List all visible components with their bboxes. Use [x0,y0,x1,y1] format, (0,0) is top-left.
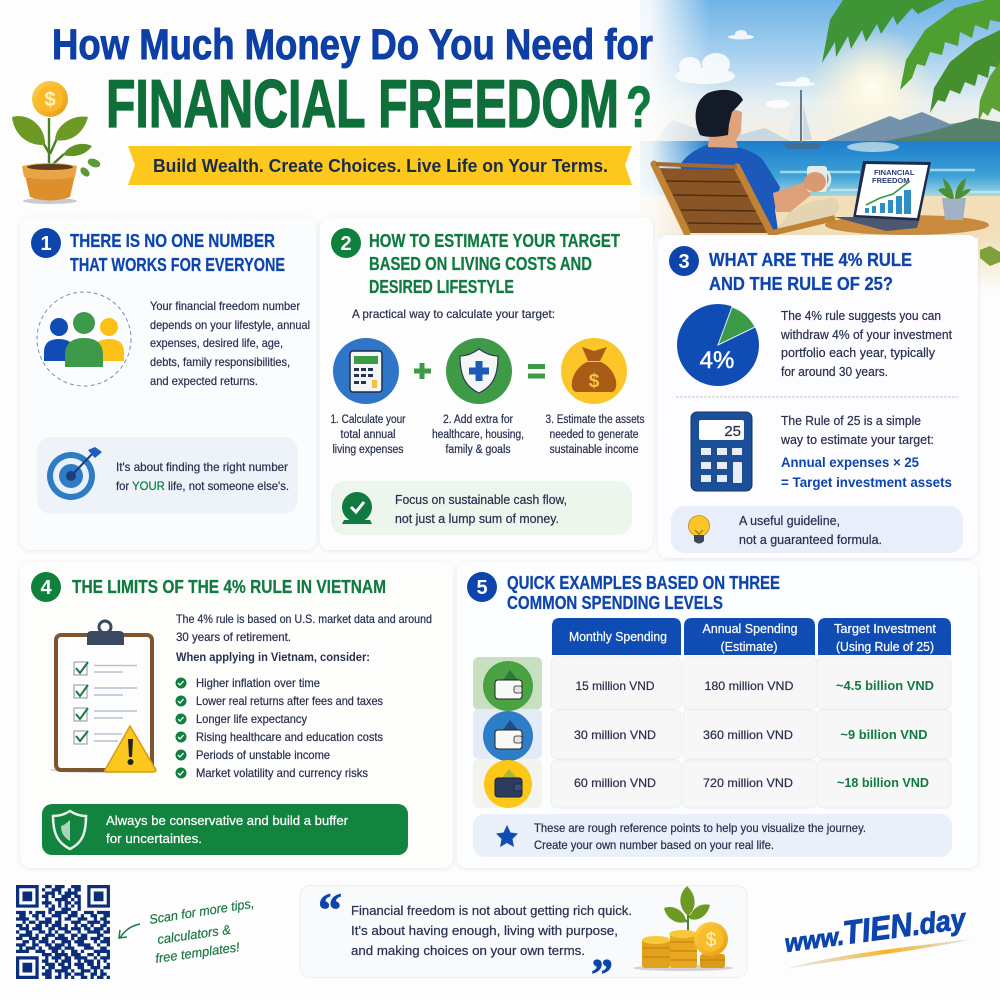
note box: These are rough reference points to help you visualize the journey. [534,821,866,835]
table header: (Using Rule of 25) [836,640,934,654]
tagline ribbon [128,146,632,185]
heading 3: AND THE RULE OF 25? [709,273,893,294]
callout: be conservative: for uncertaintes. [106,831,202,846]
table header [552,618,951,655]
step labels: living expenses [332,444,404,456]
title: How Much Money Do You Need for [52,21,653,69]
4% rule text: for around 30 years. [781,365,888,379]
rule of 25 text: Annual expenses × 25 [781,454,919,470]
step labels: family & goals [446,444,511,456]
laptop [834,161,931,231]
callout: guideline: A useful guideline, [739,514,840,528]
table rows: 720 million VND [703,776,793,790]
rule of 25 text [780,414,952,490]
tagline ribbon: Build Wealth. Create Choices. Live Life on Your Terms. [153,156,608,176]
body text: and expected returns. [150,374,258,388]
step labels [330,414,645,456]
plus sign [414,363,431,379]
quote text: Financial freedom is not about getting rich quick. [351,904,632,918]
badge 3 [669,246,699,276]
rule of 25 text: = Target investment assets [781,474,952,490]
laptop: FREEDOM [872,176,910,185]
panel 1: no one number [20,217,316,550]
pie chart 4%: 4% [700,347,734,374]
icon: bulb [688,516,710,544]
heading 3: WHAT ARE THE 4% RULE [709,249,912,270]
callout: be conservative: Always be conservative and build a buffer [106,813,349,828]
icon: calculator [333,338,399,404]
body text: expenses, desired life, age, [150,336,283,350]
badge 1: 1 [40,233,52,255]
heading 2 [369,230,621,297]
step labels: 3. Estimate the assets [546,414,645,426]
callout: be conservative [42,804,408,855]
body text: Your financial freedom number [150,299,300,313]
icon: calculator 25: 25 [724,423,741,440]
icon: target [47,447,102,500]
checklist: Lower real returns after fees and taxes [196,694,383,708]
plant with coin icon: $ [44,89,56,111]
icon: money bag [561,338,627,404]
badge 4 [31,572,61,602]
4% rule text [780,309,953,379]
quote text [351,904,632,958]
step labels: 1. Calculate your [330,414,406,426]
hero illustration: beach scene [620,0,1000,292]
heading 1 [70,230,285,275]
note box: Create your own number based on your real life. [534,838,774,852]
checklist: Periods of unstable income [196,748,330,762]
checklist: Market volatility and currency risks [196,766,368,780]
heading 1: THAT WORKS FOR EVERYONE [70,254,285,275]
heading 5: COMMON SPENDING LEVELS [507,592,723,613]
icon: people [37,292,131,386]
rule of 25 text: way to estimate your target: [780,433,934,447]
table rows: ~9 billion VND [840,727,928,742]
heading 5: QUICK EXAMPLES BASED ON THREE [507,572,780,593]
closing quote mark: ” [591,950,613,999]
icon: money bag: $ [589,371,600,392]
quote text: and making choices on your own terms. [351,944,585,958]
laptop: FINANCIAL [874,168,915,177]
callout: guideline [671,506,963,553]
title [52,21,653,142]
mountains [655,120,790,141]
table rows: ~18 billion VND [837,775,929,790]
title: FINANCIAL FREEDOM [106,66,619,142]
step labels: sustainable income [550,444,638,456]
intro text: When applying in Vietnam, consider: [176,650,370,664]
heading 5 [507,572,780,613]
icon: star [496,825,518,847]
website logo: www.TIEN.day [782,898,969,959]
callout: cash flow: not just a lump sum of money. [395,512,559,526]
table header: Annual Spending [702,622,798,636]
heading 3 [709,249,912,294]
4% rule text: portfolio each year, typically [781,346,936,360]
table with plant [825,178,989,235]
table header: Monthly Spending [569,630,667,644]
callout: guideline: not a guaranteed formula. [739,533,882,547]
badge 1 [31,228,61,258]
badge 3: 3 [678,251,690,273]
panel 5: quick examples [457,562,978,868]
opening quote mark: “ [318,884,342,937]
badge 2: 2 [340,233,352,255]
heading 1: THERE IS NO ONE NUMBER [70,230,275,251]
rule of 25 text: The Rule of 25 is a simple [781,414,921,428]
body text: depends on your lifestyle, annual [150,318,310,332]
note box [473,814,952,857]
table header: Target Investment [834,622,937,636]
heading 2: DESIRED LIFESTYLE [369,276,514,297]
man with coffee on deck chair [654,90,839,233]
table rows: 60 million VND [574,776,656,790]
icon: shield [53,811,86,849]
icon: check badge [342,492,372,524]
table rows [551,657,951,808]
QR code [16,885,110,979]
badge 4: 4 [40,577,52,599]
checklist [176,676,383,780]
body text [150,299,310,388]
4% rule text: The 4% rule suggests you can [781,309,941,323]
badge 2 [331,228,361,258]
step labels: 2. Add extra for [443,414,513,426]
table rows: 15 million VND [576,679,655,693]
step labels: total annual [340,429,396,441]
callout: right number [37,437,298,514]
wallet icon column [473,657,542,808]
quote box [300,884,747,999]
arrow to QR [119,924,140,938]
table rows: 180 million VND [704,679,794,693]
equals sign [528,366,545,376]
table rows: 360 million VND [703,728,793,742]
palm fronds [822,0,1000,123]
step labels: healthcare, housing, [432,429,524,441]
body text: debts, family responsibilities, [150,355,290,369]
icon: clipboard with warning [50,621,156,773]
checklist: Rising healthcare and education costs [196,730,383,744]
table rows: ~4.5 billion VND [836,678,934,693]
handwritten note: calculators & [156,922,232,947]
plant with coin icon [12,81,101,204]
badge 5 [467,572,497,602]
4% rule text: withdraw 4% of your investment [780,328,953,342]
pie chart 4% [677,304,759,386]
heading 2: BASED ON LIVING COSTS AND [369,253,592,274]
quote text: It's about having enough, living with purpose, [351,924,618,938]
callout: right number: for YOUR life, not someone else's. [116,479,289,493]
intro text: A practical way to calculate your target: [352,307,555,321]
handwritten note: Scan for more tips, [148,896,255,927]
intro text: 30 years of retirement. [176,630,291,644]
checklist: Longer life expectancy [196,712,307,726]
callout: cash flow: Focus on sustainable cash flow, [395,493,567,507]
callout: cash flow [331,481,632,535]
panel 4: limits in Vietnam [20,562,453,868]
step labels: needed to generate [550,429,638,441]
table rows: 30 million VND [574,728,656,742]
heading 2: HOW TO ESTIMATE YOUR TARGET [369,230,621,251]
badge 5: 5 [476,577,488,599]
icon: coins with plant: $ [706,930,717,951]
heading 4: THE LIMITS OF THE 4% RULE IN VIETNAM [72,576,386,597]
checklist: Higher inflation over time [196,676,320,690]
panel 3: 4% rule and rule of 25 [658,235,978,558]
handwritten note: free templates! [154,939,241,966]
table header: (Estimate) [720,640,778,654]
callout: right number: It's about finding the right number [116,460,288,474]
intro text: The 4% rule is based on U.S. market data and around [176,612,432,626]
icon: health shield [446,338,512,404]
title: ? [626,75,652,140]
icon: calculator 25 [691,412,752,491]
panel 2: estimate target [320,217,653,550]
sailboat [783,90,822,149]
intro text [176,612,432,664]
handwritten note [148,896,255,966]
icon: coins with plant [633,886,733,971]
